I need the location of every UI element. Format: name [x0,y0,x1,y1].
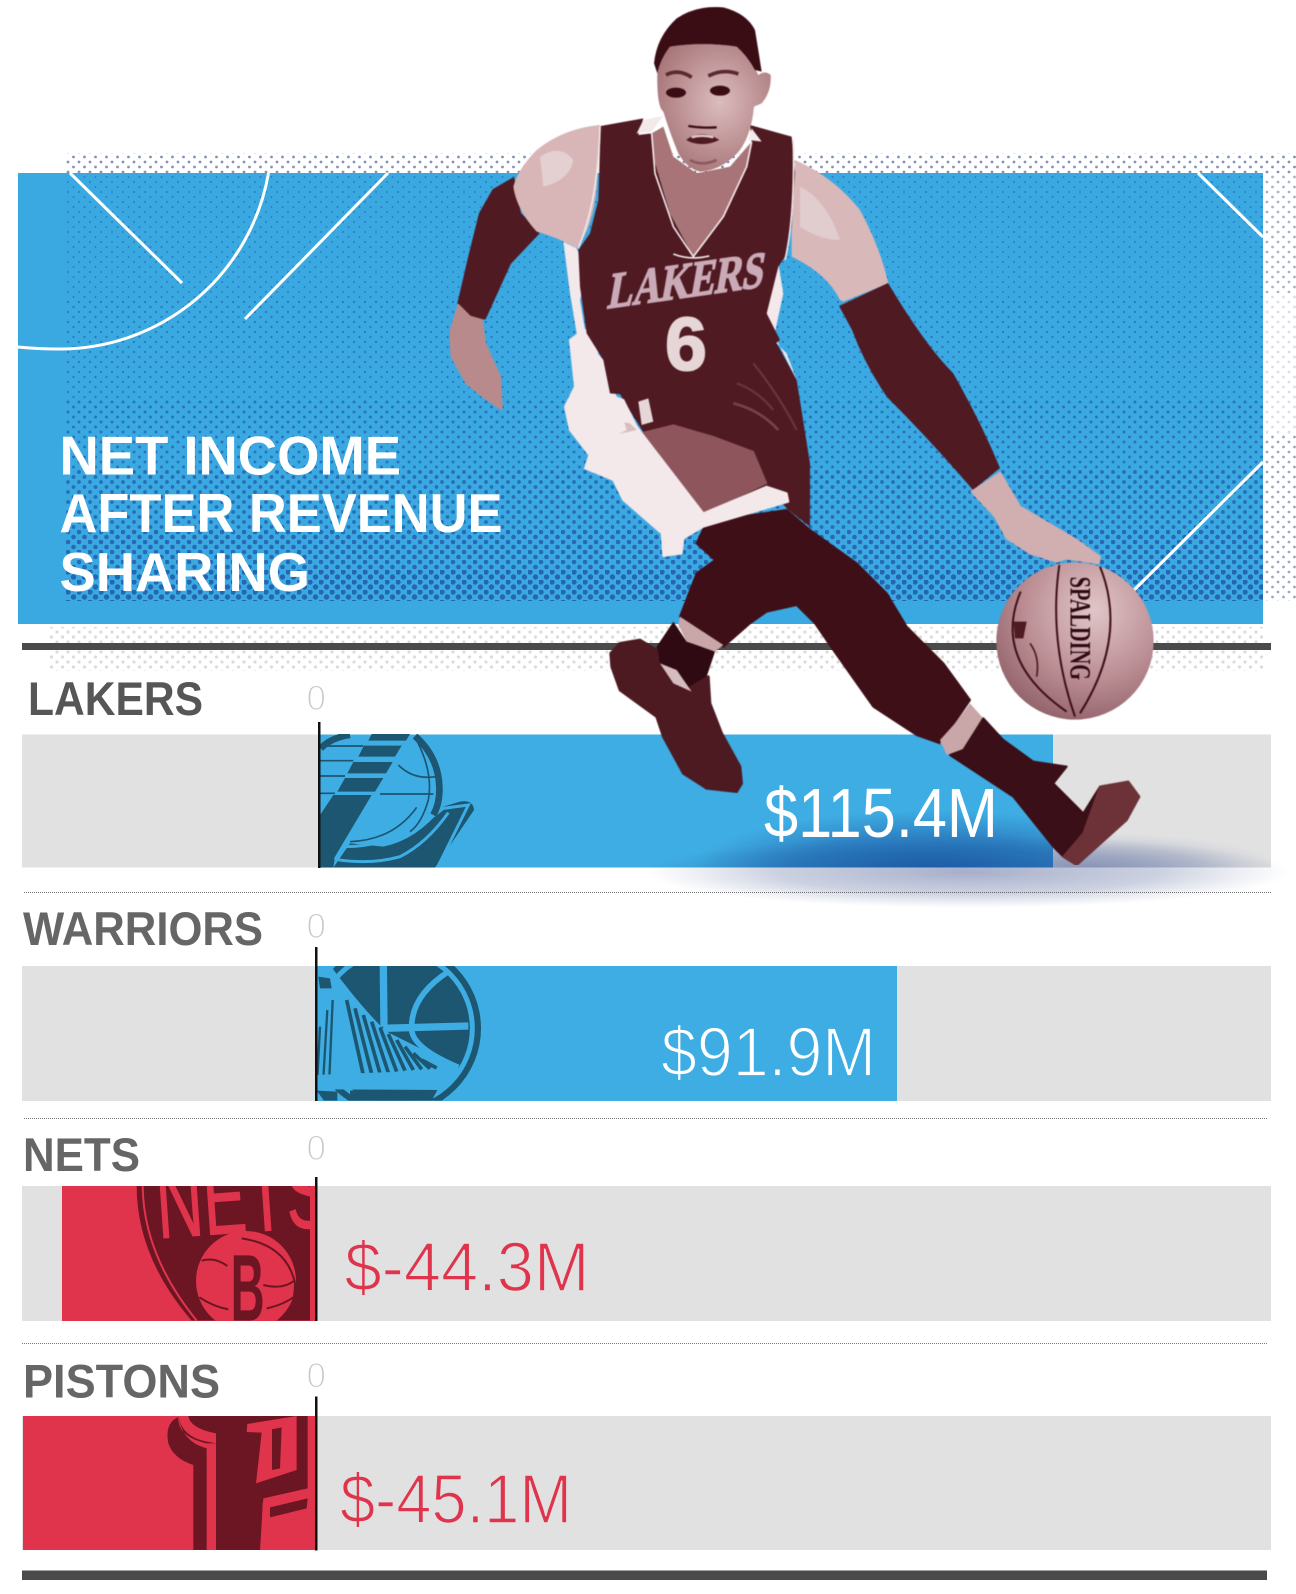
shadow under player [668,816,1271,906]
row: Pistons: 0 [306,1356,326,1396]
value: Warriors: $91.9M [661,1013,876,1091]
row: Pistons: PISTONS [23,1354,220,1408]
row: Lakers: LAKERS [28,672,203,725]
row: Nets: 0 [306,1129,326,1168]
head [654,7,771,172]
title: NET INCOME [60,424,401,486]
icon: Nets logo [136,1186,310,1321]
row: Nets [22,1136,1271,1321]
title: SHARING [60,541,310,603]
halftone dots behind panel [48,153,1296,671]
player lower body [565,330,983,792]
court lines [18,173,1263,594]
right sleeve [839,283,1000,490]
icon: Nets logo: NETS [152,1132,333,1260]
title [60,424,502,603]
row: Lakers: 0 [306,679,326,718]
row: Warriors [22,912,1271,1101]
divider [24,1118,1268,1120]
row: Warriors: 0 [306,907,326,946]
icon: Nets logo: B [231,1236,265,1342]
icon: Warriors logo [318,966,481,1101]
player arms and torso [450,7,888,450]
value: Pistons: $-45.1M [340,1460,572,1538]
panel: blue court header [18,173,1263,624]
icon: Lakers logo [319,734,474,868]
row: Warriors: WARRIORS [23,902,263,955]
hand, ball and front foot [940,473,1154,865]
jersey lettering: LAKERS [605,241,770,320]
top rule [22,643,1271,650]
row: Nets: NETS [23,1128,140,1181]
row: Pistons [22,1354,1271,1550]
icon: basketball [996,562,1154,720]
value: Lakers: $115.4M [764,774,998,852]
icon: Pistons logo [167,1416,311,1550]
title: AFTER REVENUE [60,482,502,544]
bottom rule [22,1570,1267,1580]
player arms and torso: 6 [665,302,707,386]
divider [24,892,1271,894]
value: Nets: $-44.3M [344,1228,590,1306]
icon: basketball: SPALDING [1064,577,1097,680]
divider [22,1342,1268,1344]
row: Lakers [22,672,1271,868]
player illustration [450,7,1154,865]
